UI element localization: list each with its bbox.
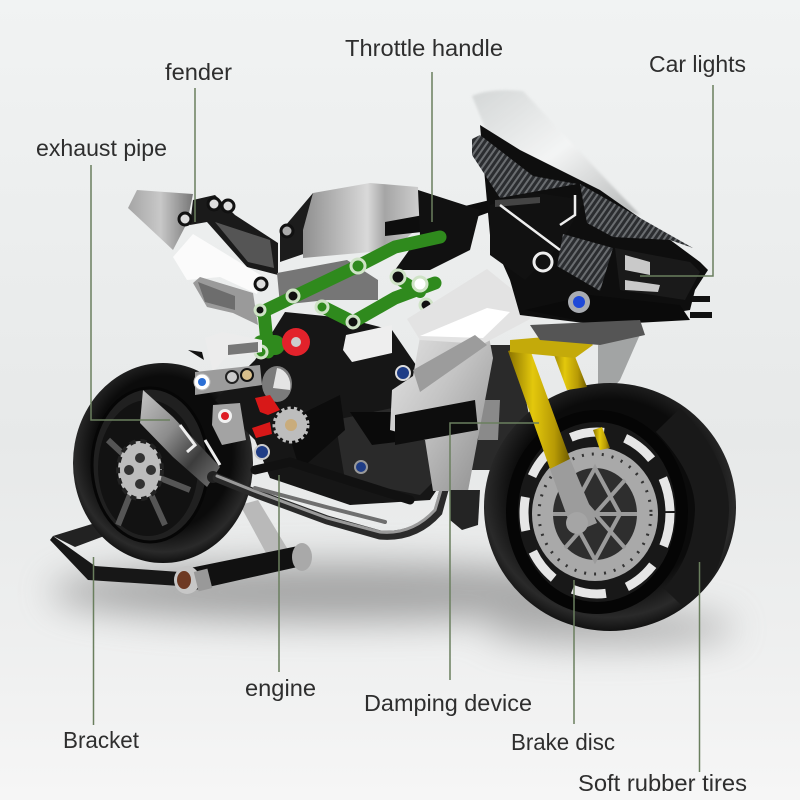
label: Brake disc: Brake disc — [511, 729, 615, 755]
damping hose — [450, 490, 480, 530]
engine mass — [215, 312, 450, 505]
fender support — [598, 330, 642, 405]
green frame — [255, 237, 440, 358]
blue piston cap — [194, 374, 210, 390]
red parts — [252, 395, 280, 438]
carbon lower — [557, 234, 613, 291]
engine details — [188, 325, 430, 473]
leader line: engine — [278, 475, 280, 672]
front forks — [508, 334, 610, 534]
rear stand — [50, 500, 312, 594]
carbon upper left — [472, 135, 577, 198]
label: Damping device: Damping device — [364, 690, 532, 716]
white ring bolt — [534, 253, 552, 271]
leader line: brake disc — [573, 580, 575, 724]
wheel rim ring — [524, 432, 670, 594]
blue bolt — [568, 291, 590, 313]
red gear — [282, 328, 310, 356]
rear hub — [118, 441, 162, 499]
leader line: soft rubber tires — [698, 562, 700, 772]
motorcycle — [50, 90, 736, 631]
carbon top — [580, 184, 693, 248]
frame rings — [255, 259, 432, 358]
leader line: fender — [194, 88, 196, 222]
silver fairing — [390, 269, 530, 491]
front cowl — [472, 90, 712, 345]
parts behind fork — [465, 345, 530, 470]
silver gear — [275, 409, 307, 441]
brake disc — [532, 447, 658, 581]
windscreen — [472, 90, 640, 215]
label: Car lights: Car lights — [649, 51, 746, 77]
rear wheel — [73, 363, 253, 563]
chrome dome — [262, 366, 292, 402]
leader line: throttle handle — [431, 72, 433, 222]
leader line: damping device — [450, 423, 539, 680]
label: fender: fender — [165, 59, 232, 85]
leader line: bracket — [92, 557, 94, 725]
exhaust pipes — [217, 462, 444, 535]
leader line: exhaust pipe — [91, 165, 170, 420]
red piston — [212, 403, 246, 445]
label: Bracket: Bracket — [63, 727, 140, 753]
headlight chrome — [615, 248, 700, 300]
exhaust muffler — [140, 390, 220, 487]
front wheel — [484, 383, 736, 631]
ground shadow — [50, 562, 735, 646]
leader line: car lights — [640, 85, 713, 276]
underseat parts — [128, 190, 278, 325]
label: Soft rubber tires: Soft rubber tires — [578, 770, 747, 796]
label: engine: engine — [245, 675, 316, 701]
tail rings — [179, 198, 267, 290]
seat box — [277, 183, 420, 305]
carbon beam — [525, 295, 690, 325]
label: exhaust pipe: exhaust pipe — [36, 135, 167, 161]
handlebar bits — [385, 190, 570, 270]
label: Throttle handle: Throttle handle — [345, 35, 503, 61]
